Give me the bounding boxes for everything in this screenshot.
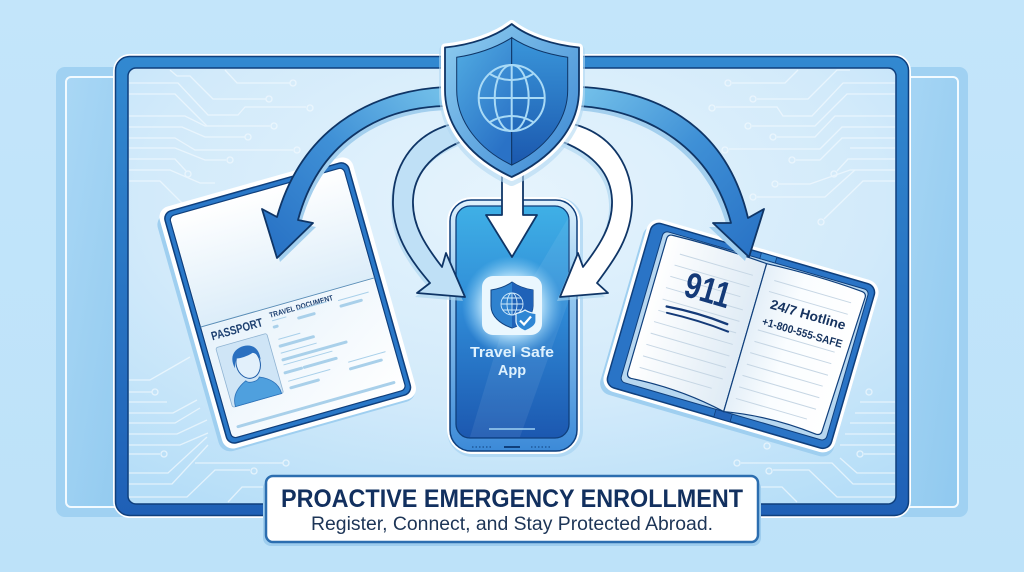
phone bottom details xyxy=(472,446,552,448)
panel: right back tab xyxy=(890,67,968,517)
notebook xyxy=(597,216,882,459)
arrow: shield to passport xyxy=(262,87,448,262)
hotline note: +1-800-555-SAFE xyxy=(761,316,844,351)
title: PROACTIVE EMERGENCY ENROLLMENT xyxy=(281,485,743,513)
arrow: shield down to phone xyxy=(486,175,537,257)
home indicator xyxy=(489,428,535,430)
passport label: PASSPORT xyxy=(210,315,265,343)
globe xyxy=(479,65,545,131)
passport photo xyxy=(216,333,284,407)
911 note xyxy=(665,260,743,332)
app name xyxy=(470,345,554,379)
icon: globe shield xyxy=(445,24,579,180)
phone xyxy=(447,197,583,457)
911 note: 911 xyxy=(680,264,736,316)
page rules xyxy=(639,251,851,422)
arrow: right inner loop to phone xyxy=(557,124,632,301)
left page xyxy=(625,233,767,412)
app icon xyxy=(482,276,542,335)
travel document label: TRAVEL DOCUMENT xyxy=(268,293,334,320)
circuit pattern xyxy=(129,70,895,502)
subtitle: Register, Connect, and Stay Protected Abroad. xyxy=(311,514,713,535)
hotline note: 24/7 Hotline xyxy=(768,297,848,333)
app glow xyxy=(462,256,562,356)
hotline note xyxy=(761,296,849,351)
passport data lines xyxy=(212,290,394,427)
app name: Travel Safe xyxy=(470,345,554,361)
title banner xyxy=(263,476,761,546)
passport xyxy=(153,155,419,454)
right page xyxy=(724,262,867,441)
panel: left back tab xyxy=(56,67,136,517)
panel: main frame xyxy=(113,54,911,518)
arrow: left inner loop to phone xyxy=(391,124,465,301)
arrow: shield to notebook xyxy=(574,87,764,261)
app name: App xyxy=(498,363,526,379)
